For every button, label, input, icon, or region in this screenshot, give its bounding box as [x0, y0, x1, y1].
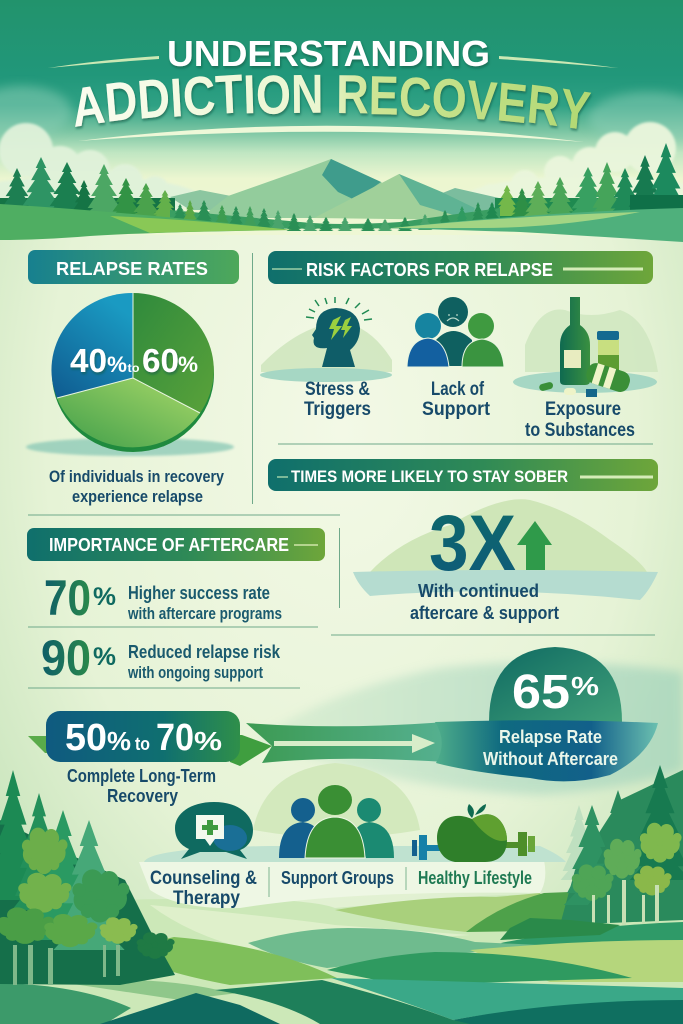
icon: lack of support people: [407, 297, 504, 420]
heading: times more likely: TIMES MORE LIKELY TO STAY SOBER: [291, 467, 568, 486]
label: lack of support: Support: [422, 399, 491, 420]
pie chart: to: [128, 361, 140, 375]
label: healthy lifestyle: Healthy Lifestyle: [418, 868, 532, 888]
panel: importance of aftercare: [27, 528, 325, 686]
label: counseling: Therapy: [173, 888, 240, 909]
caption: [410, 581, 559, 623]
title ornament lines: [48, 56, 618, 68]
pie chart: 60: [142, 342, 179, 379]
panel: support options: [144, 763, 566, 909]
caption: Of individuals in recovery: [49, 467, 224, 486]
heading: times more likely: [268, 459, 658, 491]
panel: 50 to 70: to: [135, 734, 150, 754]
arrow: [274, 734, 435, 753]
dome backdrop: [253, 763, 420, 838]
left pines: [0, 157, 178, 220]
panel: 50 to 70: 50: [65, 717, 107, 759]
clouds right: [465, 122, 683, 220]
label: exposure: Exposure: [545, 399, 621, 420]
panel: 50 to 70: 70: [156, 717, 194, 759]
panel: 65%: Without Aftercare: [483, 749, 618, 769]
caption: long-term recovery: [67, 766, 216, 806]
panel: 65%: 65: [512, 666, 570, 719]
panel: 65%: %: [571, 671, 599, 701]
stat: 70%: with aftercare programs: [127, 604, 282, 623]
hill backdrop: [370, 499, 647, 572]
panel: 50 to 70: %: [194, 726, 222, 756]
caption: aftercare & support: [410, 603, 559, 623]
icon: apple and dumbbell: [412, 804, 535, 862]
panel: 65%: [435, 647, 658, 781]
valley tree line: [170, 200, 500, 231]
band: [144, 846, 566, 862]
flow: recovery vs relapse: [28, 647, 658, 806]
hills: [0, 890, 683, 1024]
faint far clouds: [0, 86, 683, 144]
panel: 50 to 70: %: [107, 726, 131, 756]
label: counseling: Counseling &: [150, 868, 257, 889]
panel: risk factors: [260, 251, 658, 441]
title line: addiction recovery: ADDICTIONRECOVERY: [69, 63, 593, 142]
heading: risk factors: [268, 251, 653, 284]
clouds left: [0, 123, 200, 220]
icon: counseling chat: [175, 802, 253, 859]
caption: With continued: [418, 581, 539, 601]
soft background swooshes: [255, 662, 683, 795]
bottom landscape: [0, 765, 683, 1024]
left meadow hill: [0, 204, 292, 240]
right meadow hill: [392, 208, 683, 242]
caption: long-term recovery: Complete Long-Term: [67, 766, 216, 786]
panel: 65%: Relapse Rate: [499, 727, 602, 747]
icon: stress head: [260, 297, 392, 420]
icon: up arrow: [517, 521, 552, 570]
pie chart: %: [107, 352, 127, 377]
stat: 90%: with ongoing support: [127, 663, 263, 682]
heading: aftercare: IMPORTANCE OF AFTERCARE: [49, 535, 289, 555]
title: [48, 33, 618, 142]
label: stress: Triggers: [304, 399, 371, 420]
text banner: [139, 859, 545, 908]
panel: 50 to 70: [28, 711, 272, 766]
mountains: [170, 159, 499, 220]
pie chart: [26, 293, 234, 456]
header scene: sky, clouds, mountains, forest: [0, 0, 683, 242]
caption: [49, 467, 224, 506]
left forest: [0, 770, 175, 985]
caption: experience relapse: [72, 487, 203, 506]
dividers: [28, 253, 655, 688]
right pines: [494, 143, 683, 218]
right forest: [500, 765, 683, 940]
arrow band: [246, 722, 445, 763]
label: stress: Stress &: [305, 379, 370, 400]
label: lack of support: [422, 379, 491, 420]
stat: 70%: %: [93, 583, 116, 611]
panel: times more likely: [268, 459, 658, 623]
stat: 3x: 3X: [429, 498, 516, 587]
stat: 90%: %: [93, 643, 116, 671]
title line: understanding: UNDERSTANDING: [167, 33, 490, 74]
stat: 70%: 70: [44, 570, 91, 626]
icon: substances: [513, 297, 658, 441]
pie chart: %: [178, 352, 198, 377]
stat: 90%: Reduced relapse risk: [128, 642, 281, 662]
stat: 70%: [44, 570, 282, 626]
label: counseling: [150, 868, 257, 909]
stat: 90%: 90: [41, 630, 91, 686]
pie chart: 40: [70, 342, 107, 379]
heading: aftercare: [27, 528, 325, 561]
title swoosh: [78, 126, 584, 142]
label: lack of support: Lack of: [431, 379, 485, 400]
stat: 90%: [41, 630, 281, 686]
label: exposure: to Substances: [525, 420, 635, 441]
label: support groups: Support Groups: [281, 868, 394, 888]
panel: relapse rates: [26, 250, 239, 506]
label: stress: [304, 379, 371, 420]
caption: long-term recovery: Recovery: [107, 786, 178, 806]
icon: support groups: [279, 785, 394, 858]
heading: relapse rates: RELAPSE RATES: [56, 259, 208, 279]
swoosh: [353, 570, 658, 600]
heading: risk factors: RISK FACTORS FOR RELAPSE: [306, 260, 553, 280]
label: exposure: [525, 399, 635, 441]
heading: relapse rates: [28, 250, 239, 284]
stat: 70%: Higher success rate: [128, 583, 270, 603]
